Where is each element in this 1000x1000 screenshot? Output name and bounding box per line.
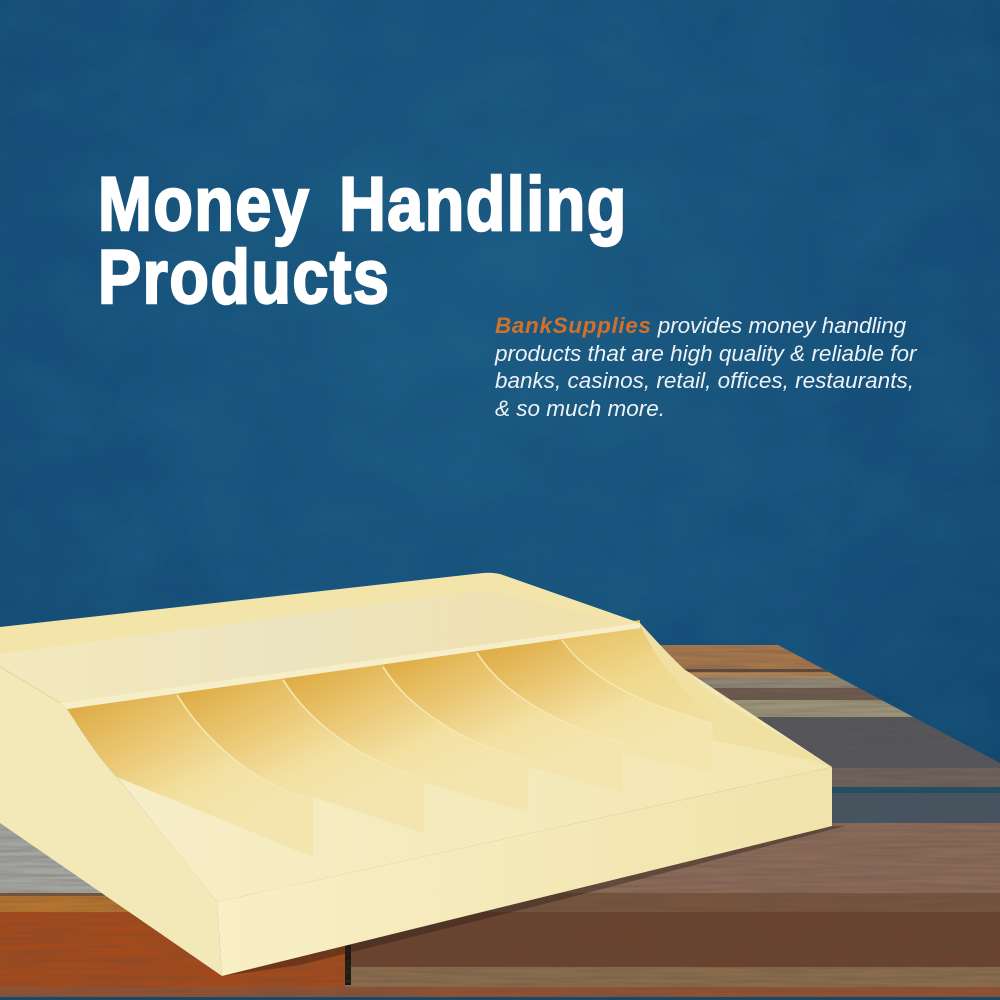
tray left side xyxy=(0,667,222,976)
product: money tray xyxy=(0,573,845,976)
pocket 3 xyxy=(283,664,527,812)
title: Money Handling xyxy=(98,162,628,247)
title xyxy=(98,162,628,320)
pocket 1 xyxy=(67,692,313,857)
title: Products xyxy=(98,235,390,320)
tray top shelf xyxy=(0,573,640,709)
description: banks, casinos, retail, offices, restaurants, xyxy=(495,368,914,393)
tray floor xyxy=(117,640,832,902)
pocket 6 and right wall xyxy=(562,623,832,767)
pocket 5 xyxy=(477,638,712,773)
description xyxy=(494,313,918,420)
tray shadow xyxy=(222,826,845,976)
description: products that are high quality & reliable for xyxy=(495,340,916,366)
tray front edge xyxy=(217,767,832,976)
pocket 4 xyxy=(383,650,622,792)
description: & so much more. xyxy=(495,396,665,420)
pocket back strip xyxy=(60,620,640,722)
pocket 2 xyxy=(177,677,424,833)
divider blade edges xyxy=(177,640,712,857)
wooden table xyxy=(0,645,1000,1000)
description: BankSupplies provides money handling xyxy=(495,313,906,338)
